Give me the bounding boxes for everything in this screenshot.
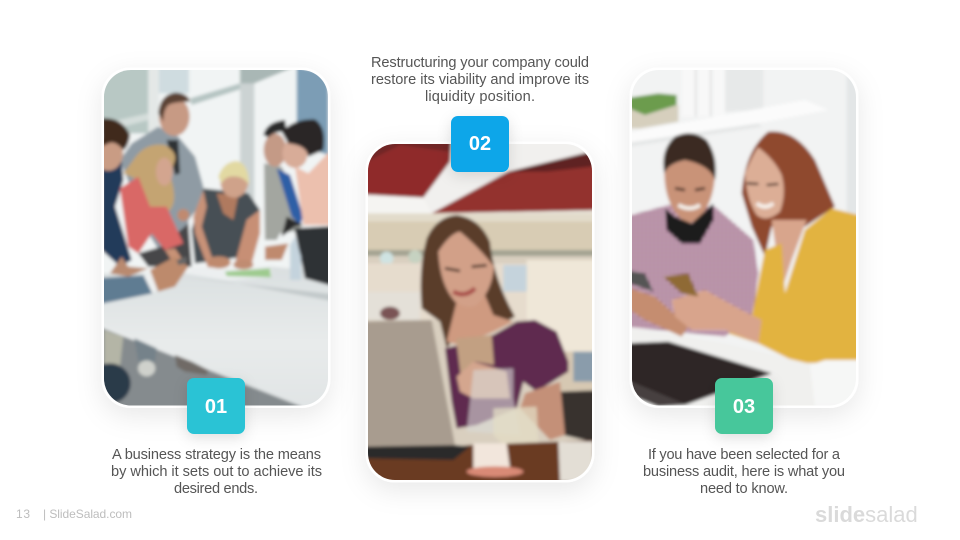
text block 01: by which it sets out to achieve its [111,464,322,480]
footer page number and site: | SlideSalad.com [43,507,132,521]
text block 03: business audit, here is what you [643,464,845,480]
badge 01 [187,378,245,434]
badge 03 [715,378,773,434]
text block 02: restore its viability and improve its [371,72,589,88]
text block 02: Restructuring your company could [371,55,589,71]
text block 01 [111,447,322,497]
text block 01: A business strategy is the means [112,447,321,463]
text block 01: desired ends. [174,481,258,497]
text block 02 [371,55,589,105]
text block 02: liquidity position. [425,89,535,105]
panel: card 2 woman with phone photo [360,135,605,495]
badge 02 [451,116,509,172]
badge 01: 01 [205,396,227,418]
panel: card 1 team meeting photo [89,60,340,420]
panel: card 3 couple looking at phones photo [625,60,870,420]
footer page number and site: 13 [16,507,30,521]
text block 03: need to know. [700,481,788,497]
badge 02: 02 [469,133,491,155]
logo: slidesalad: slidesalad [815,502,918,527]
text block 03 [643,447,845,497]
badge 03: 03 [733,396,755,418]
text block 03: If you have been selected for a [648,447,841,463]
